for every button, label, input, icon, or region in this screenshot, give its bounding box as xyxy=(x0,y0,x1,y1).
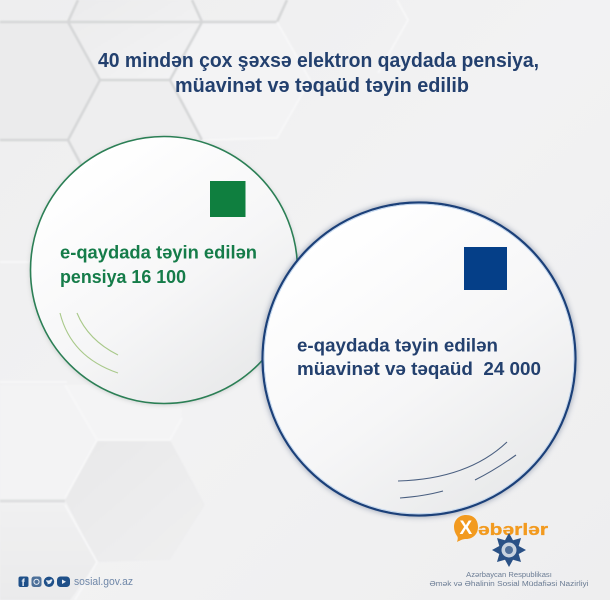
icon: ministry emblem star xyxy=(492,533,526,567)
blue square icon xyxy=(464,247,507,290)
icon: youtube xyxy=(57,576,70,587)
panel: green circle (pension) xyxy=(30,136,298,405)
blue label text: müavinət və təqaüd 24 000 xyxy=(297,359,541,379)
icon: instagram xyxy=(32,576,42,587)
title: müavinət və təqaüd təyin edilib xyxy=(175,75,469,97)
icon: twitter xyxy=(44,577,54,587)
green square icon xyxy=(210,181,246,217)
blue label text xyxy=(297,336,541,379)
green label text: e-qaydada təyin edilən xyxy=(60,242,257,262)
website text: sosial.gov.az xyxy=(74,576,133,588)
icon: facebook: f xyxy=(22,578,26,589)
decorative green arcs xyxy=(60,313,118,373)
ministry name xyxy=(430,570,589,588)
blue label text: e-qaydada təyin edilən xyxy=(297,336,498,356)
green label text xyxy=(60,242,257,287)
green label text: pensiya 16 100 xyxy=(60,267,186,287)
title xyxy=(98,50,539,97)
logo: Xəbərlər xyxy=(454,515,549,542)
hexagon pattern background xyxy=(0,0,408,600)
logo: Xəbərlər: X xyxy=(460,518,472,539)
ministry name: Əmək və Əhalinin Sosial Müdafiəsi Nazirliyi xyxy=(430,579,589,588)
panel: blue circle (benefits and scholarships) xyxy=(261,201,577,517)
social media icons and website xyxy=(18,576,133,589)
title: 40 mindən çox şəxsə elektron qaydada pensiya, xyxy=(98,50,539,72)
logo: Xəbərlər: əbərlər xyxy=(478,521,549,539)
decorative blue arcs xyxy=(398,442,516,498)
ministry name: Azərbaycan Respublikası xyxy=(466,570,552,579)
